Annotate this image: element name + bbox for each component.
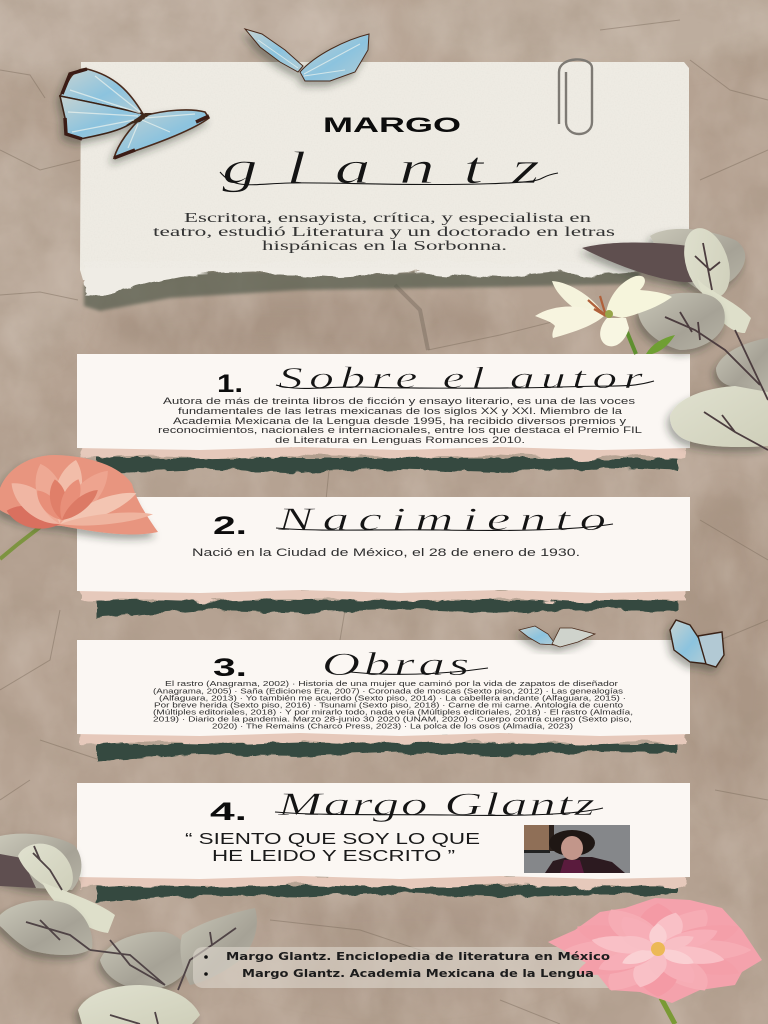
text block: description [153, 210, 615, 253]
text block: biography: Autora de más de treinta libros de ficción y ensayo literario, es una de las voces [163, 396, 636, 406]
panel: section 3 works [77, 640, 690, 761]
heading: Sobre el autor: Sobre el autor [278, 360, 644, 395]
quote: “ SIENTO QUE SOY LO QUE [185, 831, 480, 848]
leaf: gray top [0, 834, 81, 890]
text block: references: Margo Glantz. Enciclopedia de literatura en México [226, 951, 610, 963]
text block: biography: reconocimientos, nacionales e internacionales, entre los que destaca el Premio FIL [158, 425, 642, 435]
leaf: pale small [18, 844, 73, 894]
icon: paperclip [559, 59, 592, 134]
leaf: large pale [670, 386, 768, 447]
icon: small butterfly on top of the paper [245, 29, 369, 81]
illustration: peach peony [0, 455, 158, 559]
text block: list of works: Por breve herida (Sexto piso, 2016) · Tsunami (Sexto piso, 2018) · Carne de mi carne. Antología de cuento [154, 700, 623, 710]
text block: list of works: 2020) · The Remains (Charco Press, 2023) · La polca de los osos (Almadía, 2023) [212, 722, 573, 730]
panel: references background [193, 947, 643, 988]
icon: butterfly right of section 3 [670, 620, 724, 667]
heading: Margo Glantz: Margo Glantz [277, 786, 595, 822]
panel: section 1 about the author [77, 354, 690, 474]
photo: portrait of Margo Glantz [524, 825, 630, 873]
heading: MARGO: MARGO [323, 114, 461, 137]
leaf: middle gray [638, 293, 725, 350]
icon: butterfly near section 3 [519, 626, 595, 647]
heading: Obras: Obras [322, 646, 469, 682]
panel: title torn paper [80, 62, 689, 311]
heading: Nacimiento: Nacimiento [277, 501, 606, 537]
illustration: eucalyptus leaves bottom left [0, 834, 257, 1024]
text block: list of works [153, 679, 633, 730]
illustration: white lily [535, 276, 675, 354]
text block: list of works: (Anagrama, 2005) · Saña (Ediciones Era, 2007) · Coronada de moscas (Sexto piso, 2012) · Las genealogías [153, 686, 624, 696]
text block: biography: de Literatura en Lenguas Romances 2010. [275, 435, 525, 445]
text block: references [204, 951, 610, 980]
leaf: large pale gray [0, 900, 92, 955]
number 4: 4. [210, 798, 247, 826]
number 2: 2. [213, 512, 247, 540]
quote: HE LEIDO Y ESCRITO ” [212, 848, 455, 865]
leaf: upper gray [180, 908, 257, 985]
text block: list of works: El rastro (Anagrama, 2002) · Historia de una mujer que caminó por la vida de zapatos de diseñador [165, 679, 619, 688]
illustration: eucalyptus leaves top right [582, 222, 768, 450]
text block: biography: Academia Mexicana de la Lengua desde 1995, ha recibido diversos premios y [173, 416, 627, 426]
quote [185, 831, 480, 865]
heading: glantz: glantz [222, 142, 540, 193]
text block: list of works: 2019) · Diario de la pandemia. Marzo 28-junio 30 2020 (UNAM, 2020) · Cuerpo contra cuerpo (Sexto piso, [153, 714, 632, 724]
icon: large blue butterfly [60, 69, 209, 158]
text block: biography [158, 396, 642, 445]
text block: description: hispánicas en la Sorbonna. [262, 238, 507, 253]
leaf: large gray [650, 229, 745, 290]
leaf: middle gray [100, 932, 190, 990]
text block: references: Margo Glantz. Academia Mexicana de la Lengua [242, 968, 594, 980]
number 1: 1. [217, 370, 243, 398]
text block: list of works: (Alfaguara, 2013) · Yo también me acuerdo (Sexto piso, 2014) · La cabellera andante (Alfaguara, 2015) · [159, 694, 626, 702]
panel: section 2 birth [77, 497, 690, 618]
branches [26, 846, 236, 1024]
text block: list of works: (Múltiples editoriales, 2018) · Y por mirarlo todo, nada veía (Múltiples editoriales, 2018) · El rastro (Almadía, [153, 708, 633, 716]
text block: birth: Nació en la Ciudad de México, el 28 de enero de 1930. [192, 547, 580, 559]
number 3: 3. [213, 654, 247, 682]
branches [665, 243, 768, 450]
leaf: right gray [716, 338, 768, 392]
text block: biography: fundamentales de las letras mexicanas de los siglos XX y XXI. Miembro de la [178, 406, 622, 416]
text block: description: teatro, estudió Literatura y un doctorado en letras [153, 224, 615, 239]
leaf: pale small [676, 222, 738, 304]
illustration: pink dahlia [548, 898, 762, 1024]
leaf: bottom pale [78, 985, 200, 1024]
text block: description: Escritora, ensayista, crítica, y especialista en [184, 210, 591, 225]
leaf: dark wedge [582, 242, 693, 282]
panel: section 4 quote [77, 783, 690, 903]
